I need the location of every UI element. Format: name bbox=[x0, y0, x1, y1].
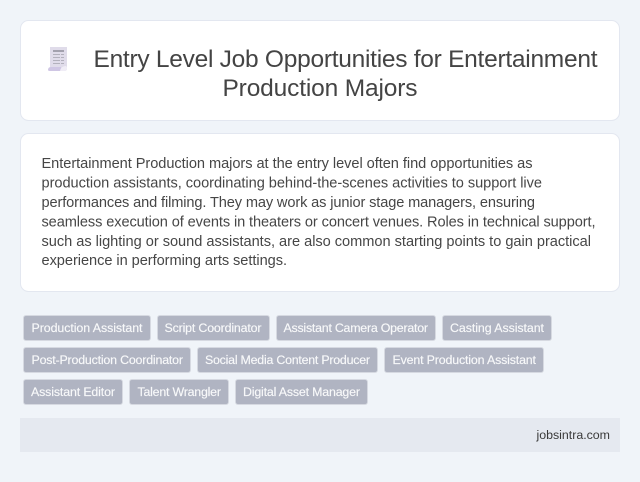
title: Production Majors bbox=[222, 75, 418, 102]
tag: Assistant Editor bbox=[24, 380, 122, 404]
icon: document scroll bbox=[48, 47, 67, 71]
tag: Talent Wrangler: Talent Wrangler bbox=[138, 385, 221, 399]
tag: Social Media Content Producer bbox=[198, 348, 378, 372]
tag: Post-Production Coordinator bbox=[24, 348, 190, 372]
tag: Production Assistant: Production Assistant bbox=[32, 321, 143, 335]
panel: header bbox=[20, 20, 620, 120]
text block: description: experience in performing arts settings. bbox=[42, 253, 287, 269]
tag: Assistant Camera Operator bbox=[276, 316, 436, 340]
tag: Assistant Camera Operator: Assistant Camera Operator bbox=[284, 321, 428, 335]
tag: Casting Assistant: Casting Assistant bbox=[450, 321, 545, 335]
text block: description bbox=[42, 156, 596, 269]
panel: description bbox=[20, 134, 620, 292]
text block: description: Entertainment Production majors at the entry level often find opportunities as bbox=[42, 156, 532, 172]
text block: description: performances and filming. They may work as junior stage managers, ensuring bbox=[42, 195, 535, 211]
title: Entry Level Job Opportunities for Entertainment bbox=[94, 46, 598, 73]
tag: Talent Wrangler bbox=[130, 380, 228, 404]
tag: Script Coordinator: Script Coordinator bbox=[164, 321, 262, 335]
text block: description: seamless execution of events in theaters or concert venues. Roles in technical support, bbox=[42, 214, 596, 230]
tag: Digital Asset Manager bbox=[236, 380, 368, 404]
tag: Social Media Content Producer: Social Media Content Producer bbox=[205, 353, 370, 367]
footer bbox=[20, 418, 620, 452]
tag: Production Assistant bbox=[24, 316, 150, 340]
title bbox=[94, 46, 598, 102]
tag list bbox=[24, 316, 552, 404]
text block: description: such as lighting or sound assistants, are also common starting points to gain practical bbox=[42, 234, 591, 250]
tag: Script Coordinator bbox=[158, 316, 270, 340]
tag: Event Production Assistant bbox=[384, 348, 544, 372]
text block: description: production assistants, coordinating behind-the-scenes activities to support live bbox=[42, 176, 542, 192]
tag: Post-Production Coordinator: Post-Production Coordinator bbox=[32, 353, 183, 367]
footer source text: jobsintra.com bbox=[536, 428, 610, 442]
tag: Event Production Assistant: Event Production Assistant bbox=[392, 353, 537, 367]
tag: Casting Assistant bbox=[442, 316, 552, 340]
tag: Assistant Editor: Assistant Editor bbox=[31, 385, 115, 399]
tag: Digital Asset Manager: Digital Asset Manager bbox=[243, 385, 360, 399]
